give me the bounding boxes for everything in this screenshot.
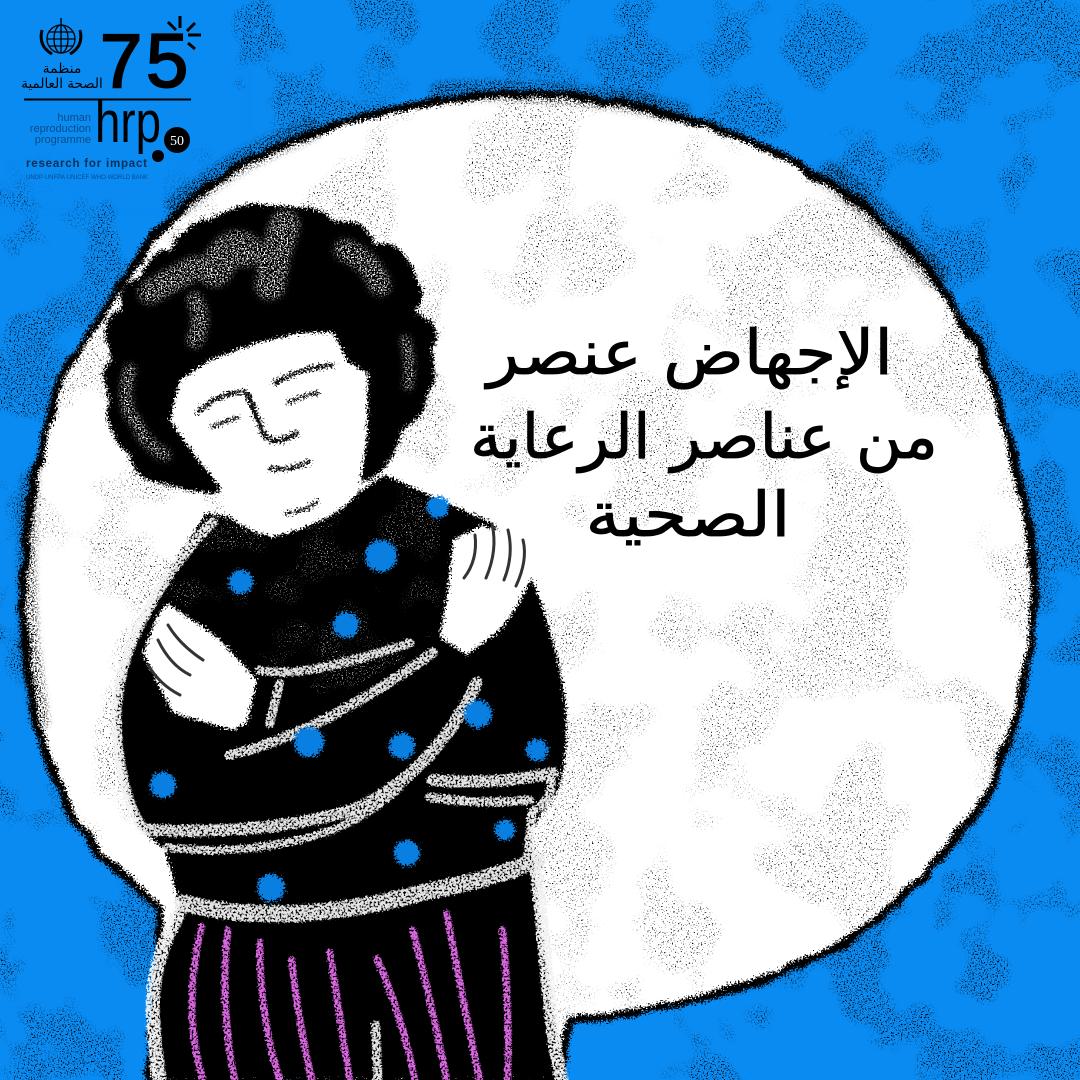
hrp wordmark: hrp — [95, 90, 161, 155]
WHO name in Arabic: الصحة العالمية — [21, 76, 103, 92]
WHO name in Arabic — [21, 61, 103, 92]
body: black dress and trousers — [116, 475, 566, 1080]
hair: curly black mass — [104, 204, 435, 493]
sleeve and belt lines: grey chalk folds — [147, 643, 553, 1080]
75th anniversary mark — [100, 16, 201, 104]
programme name: reproduction — [30, 123, 91, 135]
sponsors line: UNDP·UNFPA·UNICEF·WHO·WORLD BANK — [26, 175, 148, 181]
programme name: human — [57, 112, 91, 124]
left hand: folded with finger lines — [143, 603, 257, 730]
WHO name in Arabic: منظمة — [43, 61, 81, 77]
dots: blue polka dots on dress — [150, 496, 548, 902]
headline: Arabic statement: الإجهاض عنصر — [484, 316, 893, 390]
badge: 50 — [164, 127, 190, 153]
right hand: raised with finger lines — [440, 524, 537, 655]
programme name: programme — [35, 134, 91, 146]
headline: Arabic statement: الصحية — [586, 478, 790, 551]
headline: Arabic statement — [470, 316, 938, 551]
body outline: left edge and trouser edges — [117, 522, 562, 1080]
trouser stripes: purple chalk lines — [192, 913, 508, 1080]
body texture: white specks on upper fabric — [162, 484, 440, 696]
face features: brows, eyes, nose, mouth, chin — [198, 365, 333, 513]
headline: Arabic statement: من عناصر الرعاية — [470, 400, 938, 473]
icon: WHO emblem — [41, 18, 81, 54]
face: white head and neck — [170, 332, 368, 537]
moon edge: heavier charcoal smudges — [27, 91, 935, 720]
75th anniversary mark: 7 — [100, 19, 142, 104]
hair highlights: grey chalk curls on crown — [126, 225, 409, 455]
tagline: research for impact — [26, 158, 147, 170]
logo block: WHO 75 and HRP 50 — [21, 16, 201, 181]
programme name — [30, 112, 91, 146]
75th anniversary mark: 5 — [146, 19, 188, 104]
badge: 50: 50 — [170, 134, 184, 149]
figure: person with curly hair in dotted top and striped trousers — [100, 200, 570, 1080]
